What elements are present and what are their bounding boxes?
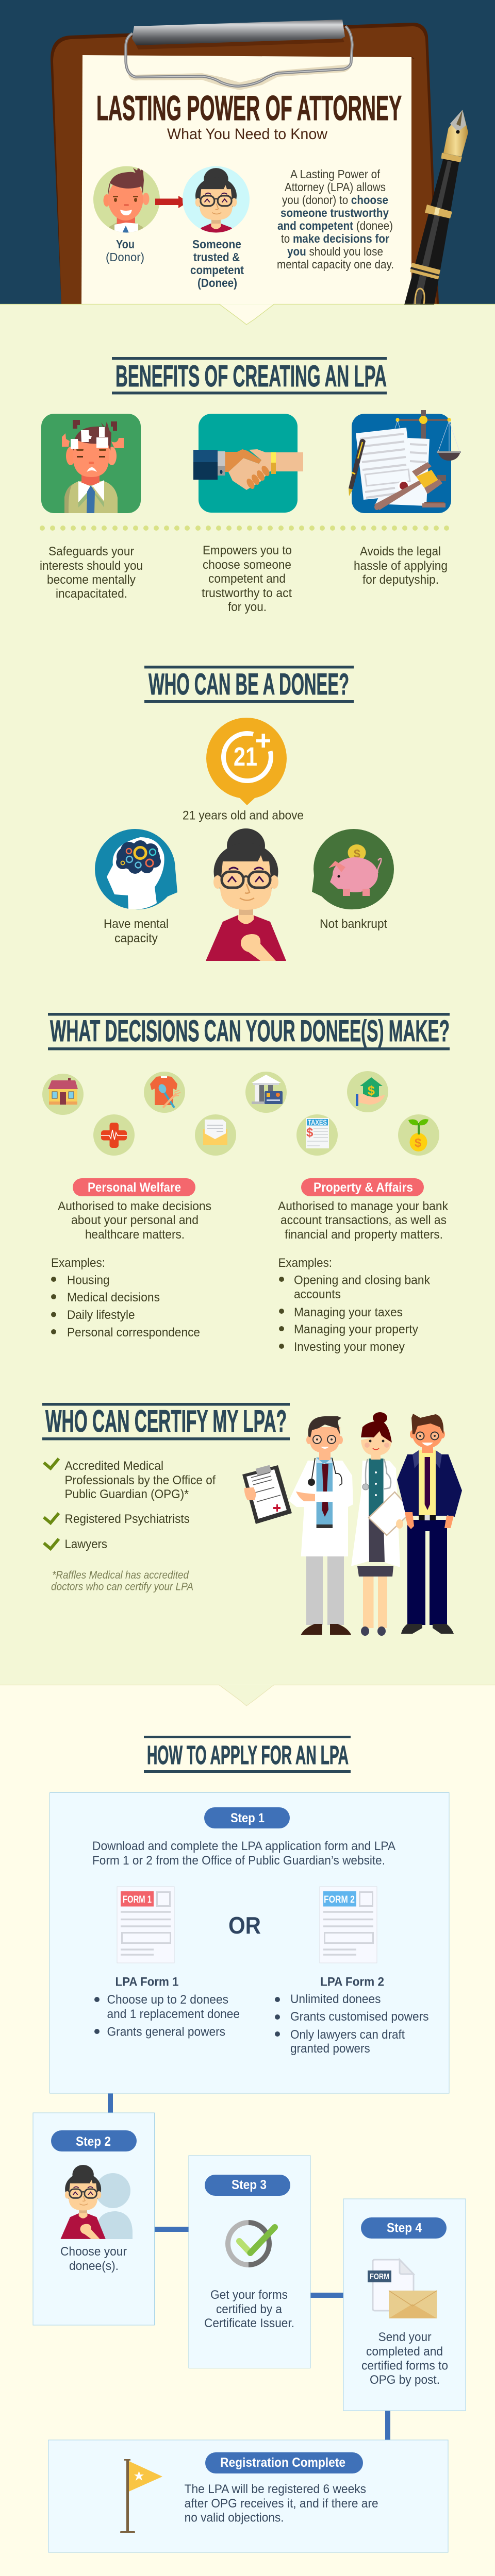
step 4 text: Send your: [378, 2330, 432, 2344]
donee label: trusted &: [193, 250, 240, 264]
step 1 instructions: [92, 1839, 395, 1868]
benefit text: empowers: [202, 544, 292, 614]
registration text: [185, 2482, 378, 2524]
step 3 text: Certificate Issuer.: [204, 2316, 294, 2330]
paper notch: [219, 304, 274, 325]
list: property examples: Investing your money: [294, 1340, 405, 1354]
panel: step 3: [189, 2156, 310, 2368]
heading: who can be a donee: WHO CAN BE A DONEE?: [148, 668, 349, 701]
icon: form and envelope: [368, 2260, 437, 2318]
pill: step 2: Step 2: [76, 2134, 111, 2149]
donee avatar: [183, 166, 250, 233]
caption: mental capacity: [104, 917, 169, 945]
benefit text: avoids: [354, 545, 448, 587]
section notch: [219, 1685, 274, 1706]
list: property examples: accounts: [294, 1287, 341, 1301]
donee label: competent: [190, 263, 244, 277]
icon: form 1 document: [117, 1887, 174, 1963]
panel: legal documents illustration: [349, 410, 461, 513]
fountain pen: [404, 110, 468, 305]
icon: hand with money house: $: [368, 1083, 375, 1098]
registration text: after OPG receives it, and if there are: [185, 2497, 378, 2511]
donee label: [190, 238, 244, 290]
illustration: three professionals: [242, 1412, 462, 1636]
benefit text: safeguards: incapacitated.: [56, 587, 127, 601]
pill: step 1: Step 1: [230, 1811, 265, 1825]
benefit text: safeguards: Safeguards your: [48, 545, 134, 558]
pill: property and affairs: Property & Affairs: [314, 1180, 413, 1195]
icon: envelope letter: [195, 1114, 236, 1156]
text: personal welfare description: about your personal and: [71, 1213, 199, 1227]
form 1 details: Grants general powers: [107, 2025, 225, 2039]
panel: step 2: [33, 2113, 155, 2325]
pill: step 4: Step 4: [387, 2221, 422, 2235]
icon: flag: [120, 2459, 162, 2533]
registration text: The LPA will be registered 6 weeks: [185, 2482, 366, 2496]
icon: 21+ bubble: 21: [234, 742, 257, 771]
icon: taxes document: TAXES: [308, 1118, 327, 1126]
benefit text: safeguards: interests should you: [40, 559, 143, 573]
intro paragraph: [277, 167, 394, 271]
step 2 text: [60, 2245, 127, 2273]
icon: money plant: $: [415, 1136, 422, 1150]
icon: check: [44, 1539, 59, 1549]
icon: donee with second person: [60, 2165, 133, 2239]
donor label: You: [116, 238, 135, 251]
text: property description: Authorised to manage your bank: [278, 1199, 449, 1213]
pill: registration complete: Registration Complete: [220, 2455, 345, 2470]
connector: [385, 2410, 390, 2441]
certifier list: Lawyers: [65, 1537, 107, 1551]
donor avatar: [93, 166, 160, 233]
list: personal welfare examples: Daily lifestyle: [67, 1308, 135, 1322]
icon: form 1 document: FORM 1: [123, 1894, 152, 1905]
list: property examples: Managing your property: [294, 1323, 418, 1336]
caption: mental capacity: Have mental: [104, 917, 169, 931]
connector: [310, 2293, 344, 2298]
panel: handshake illustration: [193, 414, 303, 513]
benefit text: empowers: Empowers you to: [203, 544, 292, 557]
donor label: (Donor): [106, 250, 144, 264]
benefit text: empowers: for you.: [228, 600, 267, 614]
title: [96, 89, 402, 143]
caption: age: 21 years old and above: [183, 809, 304, 822]
pill: step 4: [361, 2217, 447, 2239]
connector: [108, 2092, 113, 2113]
text: property description: financial and property matters.: [285, 1228, 443, 1242]
intro paragraph: someone trustworthy: [280, 206, 389, 219]
benefit text: empowers: choose someone: [203, 558, 291, 572]
intro paragraph: Attorney (LPA) allows: [285, 180, 386, 194]
pill: personal welfare: [73, 1178, 195, 1196]
pill: step 3: Step 3: [232, 2178, 267, 2192]
footnote: raffles medical: *Raffles Medical has accredited: [52, 1569, 189, 1581]
icon: 21+ bubble: [206, 718, 287, 805]
form 2 details: Unlimited donees: [290, 1992, 381, 2006]
donee label: Someone: [192, 238, 241, 251]
intro paragraph: A Lasting Power of: [290, 167, 381, 181]
heading: benefits: [112, 357, 387, 395]
form 2 details: Grants customised powers: [290, 2010, 429, 2024]
female doctor: [351, 1412, 412, 1636]
list: property examples: Managing your taxes: [294, 1306, 403, 1319]
heading: how to apply: [144, 1736, 351, 1773]
benefit text: safeguards: become mentally: [47, 573, 136, 587]
connector: [154, 2227, 189, 2232]
icon: check: [44, 1513, 59, 1523]
pill: step 2: [51, 2130, 137, 2151]
icon: taxes document: [296, 1114, 338, 1156]
registration text: no valid objections.: [185, 2511, 284, 2524]
icon: form 2 document: FORM 2: [324, 1894, 355, 1905]
intro paragraph: you (donor) to choose: [282, 193, 388, 207]
certifier list: Professionals by the Office of: [65, 1473, 216, 1487]
benefit text: avoids: for deputyship.: [362, 573, 439, 587]
certifier list: [44, 1459, 216, 1551]
arrow from donor to donee: [155, 196, 188, 208]
intro paragraph: mental capacity one day.: [277, 258, 394, 271]
icon: piggy bank: $: [354, 847, 360, 860]
form 2 details: Only lawyers can draft: [290, 2028, 405, 2042]
form 1 details: and 1 replacement donee: [107, 2007, 240, 2021]
icon: check: [44, 1459, 59, 1468]
icon: piggy bank: [312, 829, 394, 909]
pill: step 1: [204, 1807, 290, 1828]
dotted divider: [40, 526, 449, 531]
benefit text: avoids: hassle of applying: [354, 559, 448, 573]
text: property description: account transactions, as well as: [280, 1213, 447, 1227]
caption: not bankrupt: Not bankrupt: [320, 917, 387, 931]
caption: mental capacity: capacity: [114, 931, 158, 945]
intro paragraph: to make decisions for: [281, 232, 389, 245]
list: personal welfare examples: Personal correspondence: [67, 1326, 200, 1340]
subtitle: What You Need to Know: [167, 126, 327, 143]
step 4 text: completed and: [366, 2345, 443, 2359]
metal clip: [126, 20, 352, 86]
certifier list: Registered Psychiatrists: [65, 1512, 190, 1526]
benefit text: safeguards: [40, 545, 143, 601]
list: personal welfare examples: Housing: [67, 1274, 109, 1287]
footnote: raffles medical: doctors who can certify your LPA: [51, 1581, 193, 1593]
step 1 instructions: Form 1 or 2 from the Office of Public Guardian’s website.: [92, 1854, 385, 1868]
step 3 text: certified by a: [216, 2302, 283, 2316]
icon: donee woman: [206, 828, 286, 961]
pill: registration complete: [205, 2452, 363, 2473]
heading: who can be a donee: [144, 666, 354, 703]
certifier list: Accredited Medical: [65, 1459, 163, 1473]
hero background: [0, 0, 495, 305]
icon: hand with money house: [347, 1071, 388, 1112]
list: personal welfare examples: Examples:: [51, 1256, 105, 1270]
text: personal welfare description: [58, 1199, 211, 1242]
form 1 details: LPA Form 1: [116, 1975, 178, 1989]
icon: medical cross: [93, 1114, 135, 1156]
form 1 details: Choose up to 2 donees: [107, 1993, 228, 2007]
icon: form 2 document: [320, 1887, 377, 1963]
icon: daily lifestyle: [144, 1072, 185, 1113]
step 4 text: OPG by post.: [370, 2373, 440, 2387]
icon: brain head: [95, 829, 177, 909]
icon: housing: [42, 1074, 84, 1115]
panel: step 1: [50, 1793, 449, 2093]
donor label: [106, 238, 144, 264]
step 4 text: [361, 2330, 448, 2387]
panel: safeguards illustration: [41, 414, 141, 513]
list: personal welfare examples: [51, 1256, 200, 1340]
icon: taxes document: $: [306, 1126, 314, 1140]
benefit text: empowers: competent and: [208, 572, 286, 586]
list: property examples: Examples:: [278, 1256, 332, 1270]
step 3 text: Get your forms: [210, 2288, 288, 2302]
form 1 details: [94, 1975, 240, 2039]
form 2 details: [275, 1975, 429, 2056]
male doctor: [242, 1416, 353, 1635]
step 2 text: Choose your: [60, 2245, 127, 2259]
step 1 instructions: Download and complete the LPA application form and LPA: [92, 1839, 395, 1853]
list: property examples: Opening and closing bank: [294, 1274, 431, 1287]
benefit text: avoids: Avoids the legal: [360, 545, 441, 558]
certifier list: Public Guardian (OPG)*: [65, 1487, 189, 1501]
step 4 text: certified forms to: [361, 2359, 448, 2373]
icon: form and envelope: FORM: [370, 2273, 389, 2281]
panel: step 4: [343, 2199, 466, 2411]
text: property description: [278, 1199, 449, 1242]
list: personal welfare examples: Medical decisions: [67, 1291, 160, 1304]
form 2 details: granted powers: [290, 2042, 370, 2056]
panel: registration complete: [48, 2440, 448, 2552]
icon: certified check: [228, 2223, 275, 2265]
benefits section background: [0, 304, 495, 1685]
footnote: raffles medical: [51, 1569, 193, 1593]
pill: personal welfare: Personal Welfare: [88, 1180, 181, 1195]
heading: who can certify: [42, 1403, 290, 1440]
benefit text: empowers: trustworthy to act: [202, 586, 292, 600]
intro paragraph: and competent (donee): [277, 219, 393, 232]
donee label: (Donee): [197, 276, 237, 290]
man in suit: [397, 1414, 462, 1634]
list: property examples: [278, 1256, 431, 1354]
or label: OR: [228, 1912, 261, 1939]
clipboard: [51, 23, 439, 304]
step 2 text: donee(s).: [69, 2259, 119, 2273]
step 3 text: [204, 2288, 294, 2330]
heading: who can certify: WHO CAN CERTIFY MY LPA?: [45, 1404, 287, 1438]
intro paragraph: you should you lose: [287, 245, 383, 258]
pill: step 3: [205, 2175, 290, 2196]
icon: money plant: [398, 1114, 439, 1156]
text: personal welfare description: Authorised to make decisions: [58, 1199, 211, 1213]
icon: bank and card: [245, 1072, 287, 1113]
form 2 details: LPA Form 2: [320, 1975, 384, 1989]
text: personal welfare description: healthcare matters.: [85, 1228, 185, 1242]
how-to section background: [0, 1685, 495, 2576]
